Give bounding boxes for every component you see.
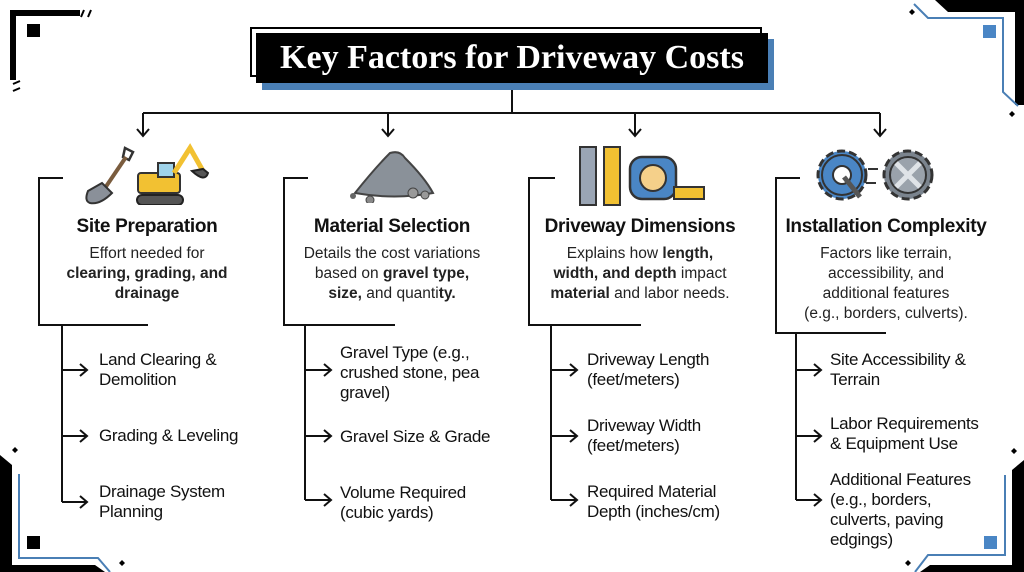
panel: material selection: size, and quantity. (328, 285, 456, 302)
list: site preparation items: Drainage System (99, 482, 225, 501)
corner: bottom-right (905, 448, 1024, 572)
panel: driveway dimensions: Explains how length, (567, 245, 713, 262)
list: dimension items: Depth (inches/cm) (587, 502, 720, 521)
heading: Site Preparation (77, 216, 217, 237)
list: dimension items: Driveway Width (587, 416, 701, 435)
panel: installation complexity: Installation Complexity (785, 216, 987, 237)
description: Effort needed for (89, 245, 205, 262)
panel: installation complexity (785, 216, 987, 322)
list: material items: crushed stone, pea (340, 363, 479, 382)
list: site preparation items: Land Clearing & (99, 350, 216, 369)
panel: installation complexity: Factors like terrain, (820, 245, 952, 262)
panel: installation complexity: accessibility, and (828, 265, 944, 282)
corner: top-left (13, 10, 91, 91)
list: material items (340, 343, 490, 522)
list: complexity items: & Equipment Use (830, 434, 958, 453)
list: site preparation items: Grading & Leveling (99, 426, 238, 445)
list: complexity items: Terrain (830, 370, 880, 389)
list: complexity items: Labor Requirements (830, 414, 979, 433)
panel: material selection: Details the cost variations (304, 245, 480, 262)
panel: driveway dimensions: width, and depth impact (553, 265, 727, 282)
list: site preparation items: Demolition (99, 370, 176, 389)
description: clearing, grading, and (66, 265, 228, 282)
panel: installation complexity: (e.g., borders, culverts). (804, 305, 968, 322)
panel: material selection: based on gravel type, (315, 265, 469, 282)
icon: gravel pile (350, 151, 434, 203)
icon: gears (816, 150, 934, 200)
list: material items: Volume Required (340, 483, 466, 502)
list: complexity items: Site Accessibility & (830, 350, 966, 369)
list: site preparation items: Planning (99, 502, 163, 521)
list: dimension items: (feet/meters) (587, 436, 679, 455)
list: material items: (cubic yards) (340, 503, 433, 522)
list: dimension items (587, 350, 720, 521)
list: dimension items: Required Material (587, 482, 716, 501)
panel: driveway dimensions: Driveway Dimensions (545, 216, 735, 237)
list: complexity items: Additional Features (830, 470, 971, 489)
icon: rulers and tape measure (579, 146, 705, 206)
list: dimension items: Driveway Length (587, 350, 709, 369)
list: complexity items: culverts, paving (830, 510, 943, 529)
panel: driveway dimensions (545, 216, 735, 302)
list: material items: Gravel Type (e.g., (340, 343, 469, 362)
corner: bottom-left (0, 447, 125, 572)
panel: installation complexity: additional features (823, 285, 949, 302)
list: complexity items: edgings) (830, 530, 893, 549)
list: site preparation items (99, 350, 238, 521)
list: material items: gravel) (340, 383, 390, 402)
list: complexity items (830, 350, 979, 549)
list: complexity items: (e.g., borders, (830, 490, 931, 509)
panel: driveway dimensions: material and labor needs. (550, 285, 730, 302)
list: material items: Gravel Size & Grade (340, 427, 490, 446)
panel: material selection (304, 216, 480, 302)
title: Key Factors for Driveway Costs (280, 39, 744, 76)
icon: shovel and excavator (85, 143, 210, 205)
title (250, 27, 774, 90)
corner: top-right (909, 0, 1024, 117)
description (66, 245, 228, 302)
panel: material selection: Material Selection (314, 216, 470, 237)
list: dimension items: (feet/meters) (587, 370, 679, 389)
description: drainage (115, 285, 179, 302)
panel: site preparation (66, 216, 228, 302)
connector tree from title (39, 83, 886, 508)
